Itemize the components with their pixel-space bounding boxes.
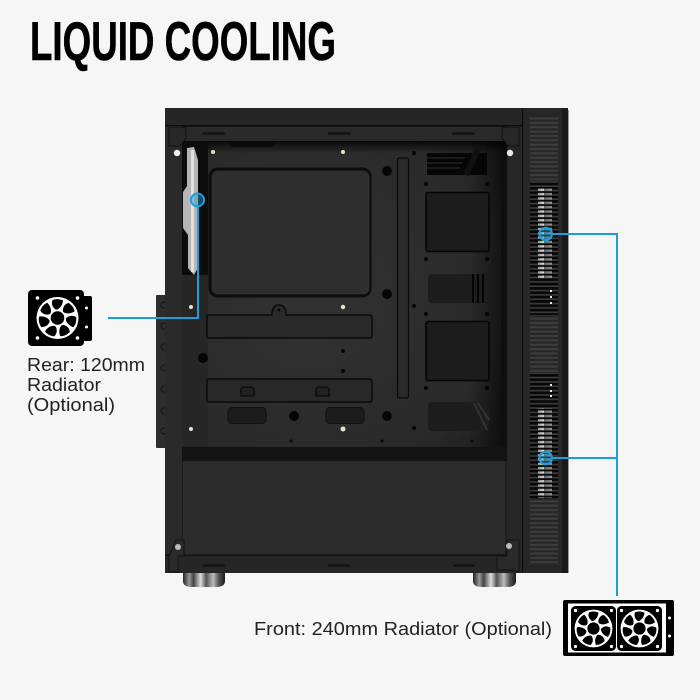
lower shroud slot with clips: [207, 379, 372, 402]
mounting holes: [198, 151, 489, 442]
top frame: [165, 108, 522, 141]
right frame post: [507, 126, 522, 573]
icon: front radiator: [563, 600, 674, 656]
rubber feet: [183, 572, 516, 587]
cable holes: [228, 408, 364, 424]
screws and standoffs: [189, 150, 346, 432]
label: rear radiator: [27, 355, 145, 415]
title: LIQUID COOLING: [30, 10, 336, 72]
PSU shroud: [183, 461, 505, 555]
bottom frame: [165, 554, 522, 573]
drive cutouts: [426, 145, 489, 431]
callout lines: front: [539, 228, 617, 596]
corner thumbscrews: [169, 127, 519, 572]
fan glimpses: [538, 187, 552, 279]
icon: rear radiator: [28, 290, 92, 346]
PC case: [156, 108, 569, 587]
front panel: [522, 108, 569, 573]
back panel interior: [182, 141, 507, 461]
lower shelf: [182, 447, 507, 461]
left frame post: [165, 126, 182, 573]
chassis body: [165, 108, 522, 573]
label: rear radiator: (Optional): [27, 395, 115, 415]
label: rear radiator: Rear: 120mm: [27, 355, 145, 375]
motherboard cutout: [208, 168, 372, 298]
label: rear radiator: Radiator: [27, 375, 101, 395]
rear fan seen from the side: [182, 141, 208, 447]
label: front radiator: Front: 240mm Radiator (Optional): [254, 619, 552, 639]
vertical channel: [398, 158, 408, 398]
rear expansion bracket: [156, 295, 167, 448]
callout line: rear: [108, 194, 204, 318]
upper shroud slot: [207, 305, 372, 338]
front vents: [530, 117, 558, 180]
